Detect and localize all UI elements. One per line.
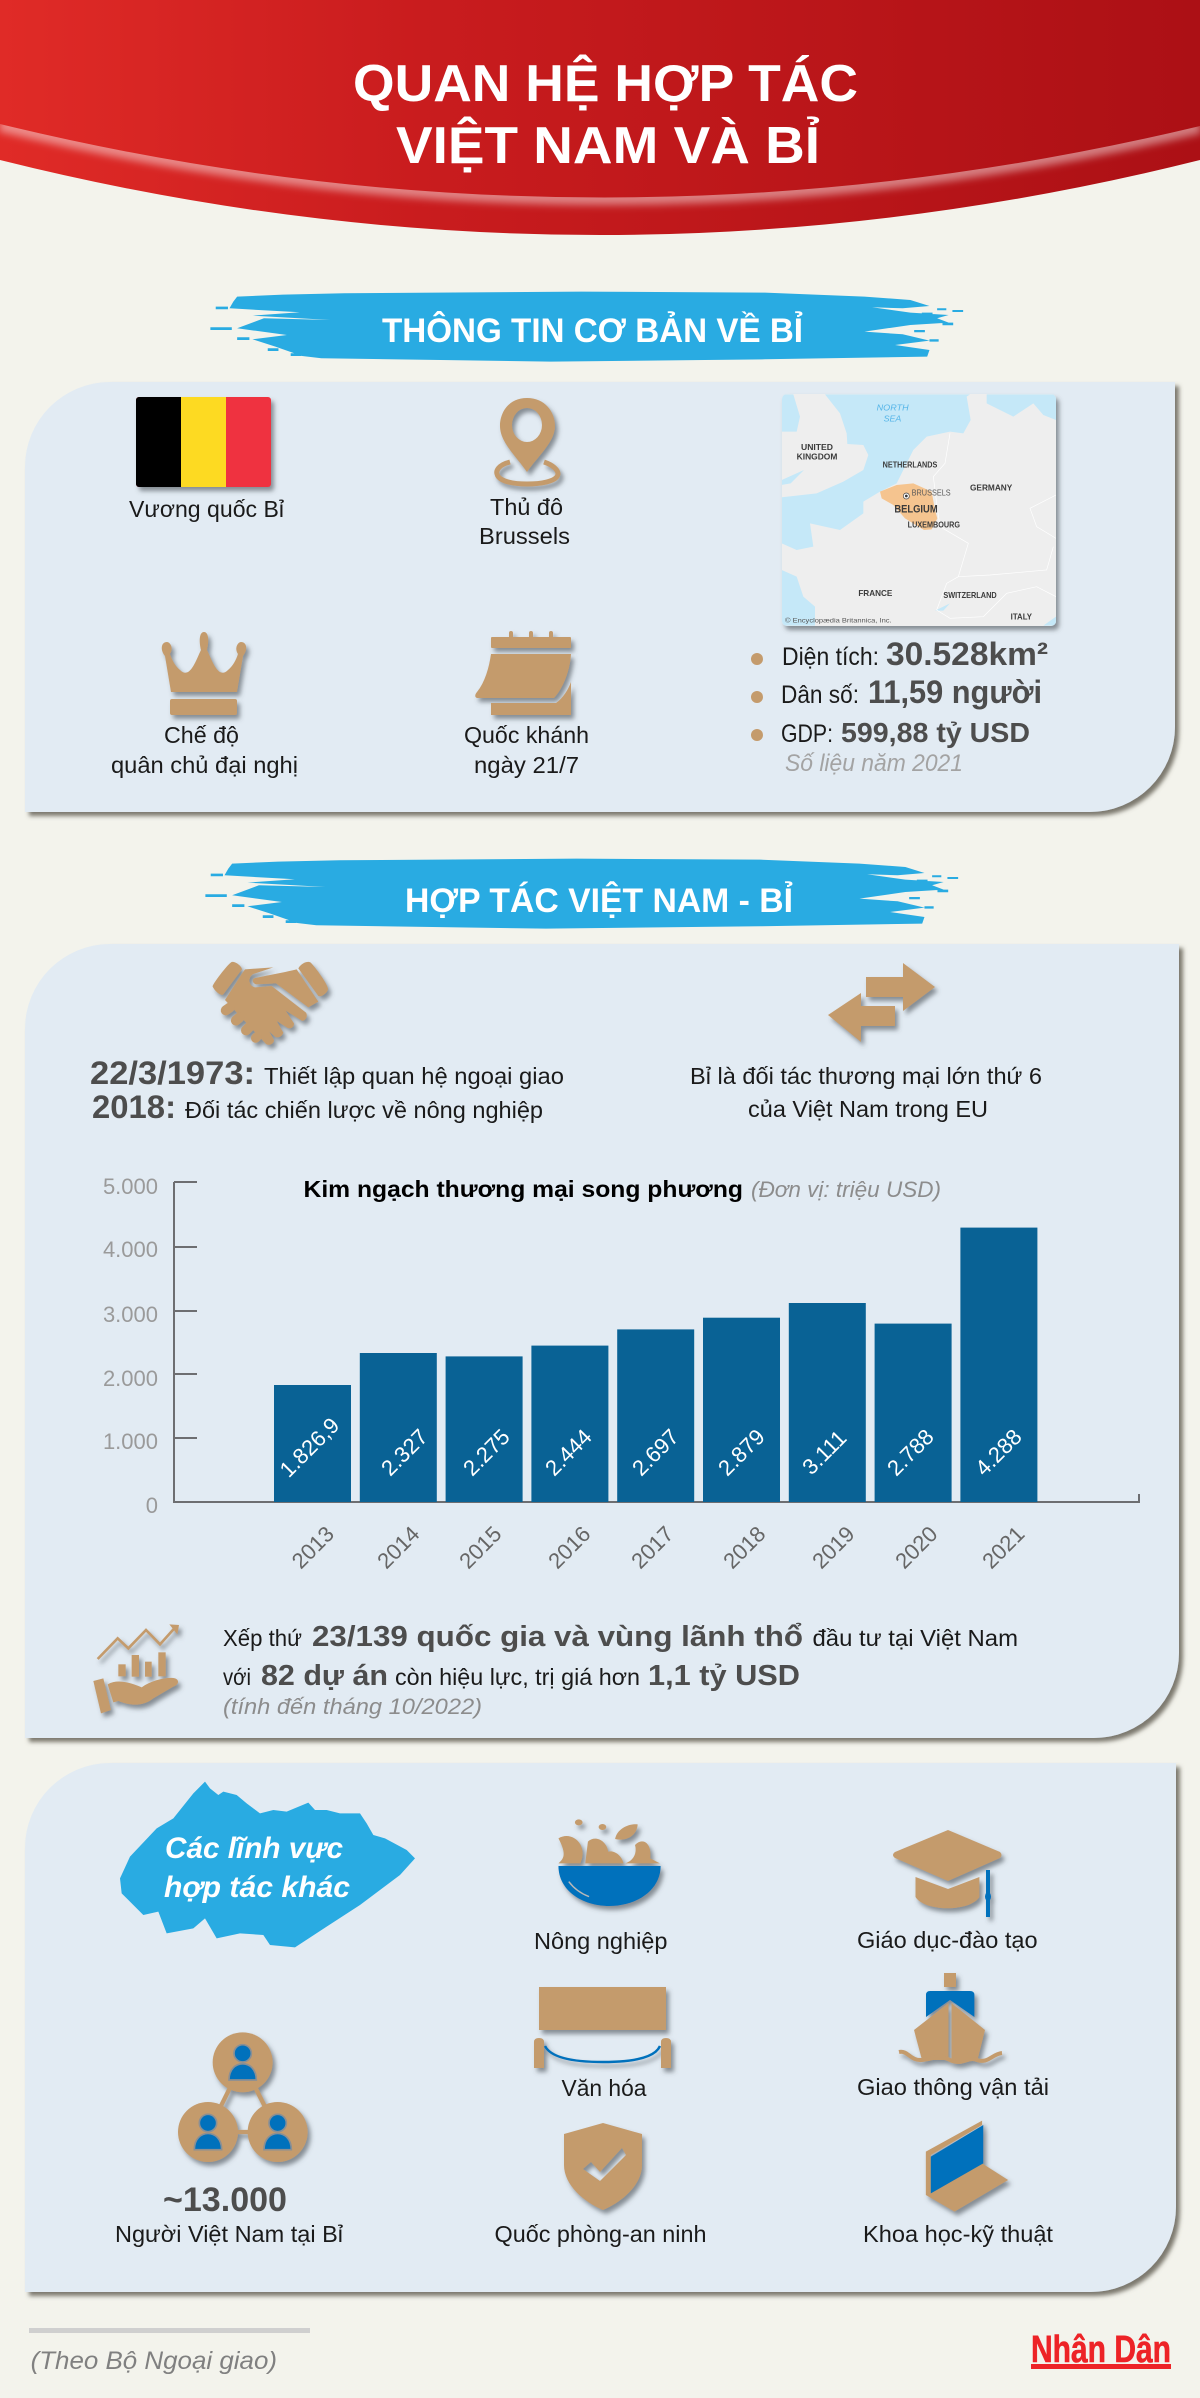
callout: other fields: hợp tác khác xyxy=(164,1871,350,1904)
text: capital: Brussels xyxy=(479,523,570,549)
map of Belgium: LUXEMBOURG xyxy=(908,519,960,529)
text: defence: Quốc phòng-an ninh xyxy=(494,2221,706,2247)
text: capital: Thủ đô xyxy=(490,494,563,520)
bar value labels: 2.275 xyxy=(458,1424,515,1481)
text: diplomatic milestones: Đối tác chiến lược về nông nghiệp xyxy=(185,1097,543,1123)
icon: laptop xyxy=(926,2121,1008,2212)
text: diplomatic milestones: Thiết lập quan hệ ngoại giao xyxy=(264,1063,564,1089)
icon: culture stage xyxy=(534,1987,671,2068)
bar value labels: 2.444 xyxy=(540,1424,597,1481)
panel: cooperation xyxy=(25,944,1179,1738)
text: culture: Văn hóa xyxy=(562,2075,647,2101)
icon: location pin xyxy=(497,398,558,484)
text: regime: Chế độ xyxy=(164,722,239,748)
text: trade partner: của Việt Nam trong EU xyxy=(748,1096,988,1122)
text: national day: Quốc khánh xyxy=(464,722,589,748)
chart title xyxy=(304,1176,941,1202)
icon: ship xyxy=(899,1973,1002,2062)
facts list: 11,59 người xyxy=(868,674,1042,710)
chart title: (Đơn vị: triệu USD) xyxy=(751,1177,941,1202)
text: agriculture: Nông nghiệp xyxy=(534,1928,668,1954)
y axis labels: 2.000 xyxy=(103,1366,158,1391)
year labels: 2020 xyxy=(890,1521,942,1573)
bar value labels: 2.327 xyxy=(376,1424,433,1481)
y axis labels: 3.000 xyxy=(103,1302,158,1327)
text: national day xyxy=(464,722,589,778)
text: investment ranking: 1,1 tỷ USD xyxy=(648,1660,800,1692)
map of Belgium xyxy=(782,394,1056,626)
map of Belgium: KINGDOM xyxy=(797,451,837,461)
text: investment ranking: 82 dự án xyxy=(261,1660,388,1692)
icon: graduation cap xyxy=(893,1830,1002,1917)
map of Belgium: ITALY xyxy=(1011,611,1032,621)
chart title: Kim ngạch thương mại song phương xyxy=(304,1176,743,1202)
year labels: 2016 xyxy=(543,1521,595,1573)
bar value labels xyxy=(275,1413,1027,1482)
title: QUAN HỆ HỢP TÁC xyxy=(353,54,858,113)
text: diplomatic milestones xyxy=(90,1055,564,1125)
text: trade partner xyxy=(690,1063,1042,1122)
icon: investment growth xyxy=(93,1624,179,1713)
year labels: 2013 xyxy=(287,1521,339,1573)
map of Belgium: NETHERLANDS xyxy=(883,460,938,470)
text: capital xyxy=(479,494,570,549)
chart axes xyxy=(174,1182,1139,1502)
text: investment ranking: đầu tư tại Việt Nam xyxy=(812,1625,1018,1651)
map of Belgium: FRANCE xyxy=(858,588,893,598)
facts list xyxy=(751,636,1048,777)
title xyxy=(353,54,858,175)
bar value labels: 4.288 xyxy=(970,1424,1027,1481)
section heading: basic information xyxy=(210,292,963,362)
callout: other fields xyxy=(120,1782,415,1947)
icon: handshake xyxy=(213,962,328,1045)
bar value labels: 2.788 xyxy=(882,1424,939,1481)
bar value labels: 1.826,9 xyxy=(275,1413,344,1482)
icon: trade arrows xyxy=(828,963,935,1042)
y axis labels: 4.000 xyxy=(103,1237,158,1262)
title: VIỆT NAM VÀ BỈ xyxy=(396,116,820,175)
year labels: 2014 xyxy=(372,1521,424,1573)
bars xyxy=(274,1228,1037,1502)
text: community size xyxy=(115,2181,343,2247)
text: investment ranking: Xếp thứ xyxy=(223,1625,302,1651)
text: investment ranking: còn hiệu lực, trị giá hơn xyxy=(395,1664,640,1690)
map of Belgium: BELGIUM xyxy=(894,503,938,515)
y axis labels: 0 xyxy=(146,1493,158,1518)
year labels: 2021 xyxy=(977,1521,1029,1573)
header banner xyxy=(0,0,1200,235)
y axis labels xyxy=(103,1174,158,1518)
text: investment ranking: với xyxy=(223,1664,251,1690)
section heading: basic information: THÔNG TIN CƠ BẢN VỀ BỈ xyxy=(382,311,803,350)
text: diplomatic milestones: 2018: xyxy=(92,1089,176,1125)
year labels: 2019 xyxy=(807,1521,859,1573)
facts list: Diện tích: xyxy=(782,643,879,671)
map of Belgium: UNITED xyxy=(801,442,833,452)
map of Belgium: GERMANY xyxy=(970,483,1013,493)
text: science and technology: Khoa học-kỹ thuật xyxy=(863,2221,1054,2247)
text: regime xyxy=(111,722,298,778)
icon: shield xyxy=(564,2123,642,2210)
map of Belgium: BRUSSELS xyxy=(912,488,951,498)
icon: Belgian flag xyxy=(136,397,271,487)
map of Belgium: SEA xyxy=(884,413,902,423)
facts list: Số liệu năm 2021 xyxy=(785,750,963,777)
facts list: 30.528km² xyxy=(886,636,1048,672)
text: investment ranking: 23/139 quốc gia và vùng lãnh thổ xyxy=(312,1621,803,1653)
y axis labels: 5.000 xyxy=(103,1174,158,1199)
text: kingdom: Vương quốc Bỉ xyxy=(129,496,284,522)
source text: (Theo Bộ Ngoại giao) xyxy=(31,2347,277,2375)
bar value labels: 3.111 xyxy=(797,1425,852,1480)
map of Belgium: © Encyclopædia Britannica, Inc. xyxy=(785,616,892,624)
year labels: 2015 xyxy=(454,1521,506,1573)
text: transport: Giao thông vận tải xyxy=(857,2074,1049,2100)
text: national day: ngày 21/7 xyxy=(474,752,579,778)
icon: Vietnamese community network xyxy=(178,2032,308,2162)
text: education: Giáo dục-đào tạo xyxy=(857,1927,1038,1953)
panel: other cooperation fields xyxy=(25,1763,1176,2292)
year labels: 2018 xyxy=(718,1521,770,1573)
text: trade partner: Bỉ là đối tác thương mại lớn thứ 6 xyxy=(690,1063,1042,1089)
section heading: cooperation xyxy=(205,859,958,929)
year labels xyxy=(287,1521,1029,1573)
facts list: GDP: xyxy=(781,720,833,748)
y axis labels: 1.000 xyxy=(103,1429,158,1454)
source rule xyxy=(29,2328,310,2333)
text: diplomatic milestones: 22/3/1973: xyxy=(90,1055,255,1091)
icon: calendar xyxy=(475,631,571,715)
bar chart: bilateral trade xyxy=(103,1174,1139,1573)
text: investment ranking: (tính đến tháng 10/2022) xyxy=(223,1694,482,1719)
text: community size: Người Việt Nam tại Bỉ xyxy=(115,2221,343,2247)
text: investment ranking xyxy=(223,1621,1018,1719)
icon: agriculture bowl xyxy=(558,1819,661,1906)
text: community size: ~13.000 xyxy=(163,2181,287,2219)
year labels: 2017 xyxy=(626,1521,678,1573)
panel: basic information xyxy=(25,382,1175,812)
callout: other fields: Các lĩnh vực xyxy=(165,1832,343,1865)
map of Belgium: SWITZERLAND xyxy=(943,590,997,600)
section heading: cooperation: HỢP TÁC VIỆT NAM - BỈ xyxy=(405,882,793,920)
bar value labels: 2.697 xyxy=(627,1424,684,1481)
icon: crown xyxy=(162,632,246,715)
facts list: 599,88 tỷ USD xyxy=(841,717,1030,748)
map of Belgium: NORTH xyxy=(877,403,910,413)
facts list: Dân số: xyxy=(781,681,859,709)
bar value labels: 2.879 xyxy=(713,1424,770,1481)
text: regime: quân chủ đại nghị xyxy=(111,752,298,778)
